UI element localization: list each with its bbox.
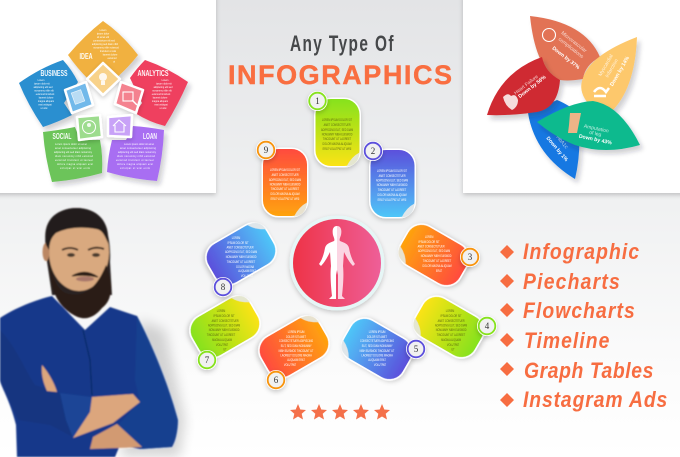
card 5: NIBH EUISMOD TINCIDUNT UT — [360, 348, 394, 353]
card 8: ADIPISCING ELIT, SED DIAM — [225, 249, 257, 254]
segment: loan: Lorem ipsum dolor sit amet — [124, 143, 154, 146]
hair sides — [45, 208, 112, 295]
card 6 — [252, 309, 336, 385]
segment: business: erat volutpat — [38, 104, 52, 106]
card 7: MAGNA ALIQUAM — [212, 337, 232, 342]
card 3: TINCIDUNT UT LAOREET — [423, 258, 451, 263]
card 6: LOREM IPSUM — [288, 329, 305, 334]
icon: kidney — [542, 28, 556, 42]
center circle with human body — [290, 216, 384, 310]
card 9: AMET CONSECTETUER — [272, 172, 299, 177]
card 9: NONUMMY NIBH EUISMOD — [270, 182, 301, 187]
feature list: Instagram Ads — [523, 388, 667, 412]
card 5: LAOREET DOLORE MAGNA — [362, 353, 393, 358]
petal: amputation — [537, 101, 640, 150]
card 7: UT — [223, 347, 227, 352]
card 4: AMET CONSECTETUER — [438, 318, 465, 323]
card 4: MAGNA ALIQUAM — [441, 337, 461, 342]
segment: social: Lorem ipsum dolor sit amet — [55, 143, 87, 146]
card 5 — [335, 311, 419, 387]
segment: business: euismod tincidunt — [36, 93, 55, 96]
shirt placket — [83, 330, 92, 395]
icon: foot — [568, 113, 581, 133]
shirt — [0, 296, 177, 457]
segment: business: ipsum dolor sit — [34, 82, 50, 86]
card 2 — [369, 148, 416, 218]
rating stars — [290, 404, 390, 420]
hair — [45, 208, 108, 250]
card 4: ADIPISCING ELIT, SED DIAM — [435, 323, 467, 328]
heading: any type of: Any Type Of — [290, 32, 395, 57]
badges: numbered circles: 6 — [274, 375, 279, 385]
segment: idea: tincidunt ut wisi — [100, 50, 117, 53]
icon tile: idea bulb — [87, 63, 120, 95]
panel: pentagon infographic — [0, 0, 216, 193]
segment: business: nonummy nibh elit — [34, 90, 54, 92]
card 1: DOLOR MAGNA ALIQUAM — [323, 141, 352, 146]
card 5: ELIT, SED DIAM NONUMMY — [362, 343, 393, 348]
segment: social: SOCIAL — [52, 132, 72, 141]
card 1: AMET CONSECTETUER — [324, 122, 351, 127]
card 4: VOLUTPAT — [447, 342, 459, 347]
segment: loan: adipiscing elit sed diam nonummy — [118, 151, 157, 154]
card 1: TINCIDUNT UT LAOREET — [323, 136, 351, 141]
card 1: ERAT VOLUTPAT UT WISI — [323, 146, 351, 151]
card 1: ADIPISCING ELIT, SED DIAM — [321, 127, 353, 132]
segment: business: laoreet dolore — [39, 96, 54, 100]
card 2: TINCIDUNT UT LAOREET — [378, 187, 406, 192]
card 7: AMET CONSECTETUER — [212, 318, 239, 323]
segment: loan: euismod tincidunt ut laoreet — [116, 159, 154, 162]
card 5: VOLUTPAT — [374, 362, 386, 367]
beard — [50, 262, 111, 318]
segment: analytics: ipsum dolor sit — [156, 82, 172, 86]
petal: myocardial: Down by 14% — [609, 55, 631, 87]
card 9 — [262, 148, 308, 218]
right sleeve — [118, 316, 178, 449]
segment: idea: ipsum dolor — [97, 32, 109, 36]
card 6: ALIQUAM ERAT — [287, 357, 305, 362]
segment: analytics: adipiscing elit sed — [154, 86, 173, 89]
segment: business: Lorem — [38, 79, 44, 82]
card 5: ALIQUAM ERAT — [368, 357, 386, 362]
petal: HbA1c: HbA1c — [555, 135, 569, 150]
segment: idea: Lorem — [100, 29, 106, 32]
card 8: NONUMMY NIBH EUISMOD — [226, 254, 257, 259]
card 1: LOREM IPSUM DOLOR SIT — [322, 117, 352, 122]
petal: amputation: Amputation — [583, 123, 609, 135]
card 3: DOLOR MAGNA ALIQUAM — [423, 263, 452, 268]
card 8: IPSUM DOLOR SIT — [227, 240, 249, 245]
card 8: DOLOR MAGNA — [236, 264, 255, 269]
card 2: ERAT VOLUTPAT UT WISI — [378, 197, 406, 202]
segment: idea — [68, 21, 138, 80]
skin: hand and forearms — [42, 365, 57, 392]
segment: business: magna aliquam — [38, 100, 54, 103]
segment: analytics: euismod tincidunt — [152, 93, 171, 96]
feature list: Flowcharts — [523, 299, 635, 323]
card 7: LOREM — [217, 308, 226, 313]
card 5: LOREM IPSUM — [369, 329, 386, 334]
segment: idea: laoreet dolore — [103, 54, 118, 56]
segment: social: diam nonummy nibh euismod — [55, 155, 94, 158]
card 7 — [183, 289, 267, 365]
segment: analytics: magna aliquam — [152, 100, 168, 103]
segment: loan: volutpat ut wisi enim — [120, 167, 150, 170]
segment: idea: adipiscing sed diam nibh — [92, 43, 119, 46]
card 6: DOLOR SIT AMET — [286, 334, 306, 339]
card 8: ALIQUAM ERAT — [238, 268, 256, 273]
feature list — [500, 240, 667, 412]
shirt cuff — [60, 393, 92, 438]
panel: petal infographic — [463, 0, 680, 193]
card 3: AMET CONSECTETUER — [418, 244, 445, 249]
feature list: Graph Tables — [524, 359, 653, 383]
card 8 — [199, 216, 283, 292]
segment: analytics: erat volutpat — [154, 104, 168, 106]
feature list: Timeline — [524, 329, 609, 353]
segment: loan: amet consectetuer adipiscing — [120, 147, 157, 150]
card 1 — [314, 98, 361, 168]
eyes and brows — [62, 248, 104, 250]
icon: human figure left half — [319, 226, 337, 299]
card 4: UT — [451, 347, 455, 352]
feature list: Piecharts — [523, 270, 620, 294]
petal: HbA1c: Down by 1% — [545, 136, 569, 163]
icon: human figure right half — [337, 226, 355, 299]
segment: idea: consectetuer elit sed — [93, 40, 116, 42]
segment: social: dolore magna aliquam erat — [57, 163, 93, 166]
segment: idea: euismod — [107, 57, 117, 60]
segment: social: euismod tincidunt ut laoreet — [55, 159, 93, 162]
badges: numbered circles: 2 — [371, 146, 375, 156]
card 8: TINCIDUNT UT LAOREET — [227, 259, 255, 264]
petal: heart failure — [487, 57, 560, 115]
card 7: ADIPISCING ELIT, SED DIAM — [208, 323, 240, 328]
petal: microvascular: Down by 37% — [551, 46, 581, 71]
card 7: VOLUTPAT — [216, 342, 228, 347]
moustache and mouth — [72, 272, 98, 277]
card 4: NONUMMY NIBH EUISMOD — [436, 327, 467, 332]
segment: loan: dolore magna aliquam erat — [117, 163, 153, 166]
card 7: IPSUM DOLOR SIT — [213, 313, 235, 318]
card 3 — [392, 217, 476, 293]
card 2: DOLOR MAGNA ALIQUAM — [378, 192, 407, 197]
badges: numbered circles: 1 — [315, 96, 320, 106]
segment: analytics: nonummy nibh elit — [152, 90, 172, 92]
petal: amputation: of leg — [589, 130, 602, 138]
card 4: TINCIDUNT UT LAOREET — [437, 332, 465, 337]
card 9: TINCIDUNT UT LAOREET — [271, 186, 299, 191]
heading: infographics: INFOGRAPHICS — [228, 60, 452, 90]
card 2: LOREM IPSUM DOLOR SIT — [377, 168, 407, 173]
card 8: VOLUTPAT — [241, 273, 253, 278]
card 9: ERAT VOLUTPAT UT WISI — [271, 196, 299, 201]
segment: idea: sit amet elit — [97, 36, 109, 39]
card 3: ADIPISCING ELIT, SED DIAM — [418, 248, 450, 253]
petal: HbA1c — [528, 100, 579, 179]
badges: numbered circles: 3 — [468, 252, 473, 262]
card 3: NONUMMY NIBH EUISMOD — [421, 253, 452, 258]
badges: numbered circles: 4 — [485, 321, 490, 331]
card 1: NONUMMY NIBH EUISMOD — [322, 132, 353, 137]
segment: idea: ut — [113, 60, 115, 64]
badges: numbered circles: 5 — [414, 344, 419, 354]
segment: analytics — [130, 60, 188, 126]
card 2: AMET CONSECTETUER — [379, 173, 406, 178]
segment: analytics: laoreet dolore — [153, 96, 168, 100]
card 8: LOREM — [232, 235, 241, 240]
segment: analytics: ut wisi — [160, 107, 167, 110]
card 9: DOLOR MAGNA ALIQUAM — [271, 191, 300, 196]
card 9: ADIPISCING ELIT, SED DIAM — [269, 177, 301, 182]
segment: business: adipiscing elit sed — [34, 86, 53, 89]
icon tile: loan house — [108, 115, 132, 137]
petal: myocardial: Myocardial — [597, 54, 615, 77]
petal: myocardial: Infarction — [604, 58, 620, 79]
card 5: DOLOR SIT AMET — [367, 334, 387, 339]
card 8: AMET CONSECTETUER — [227, 245, 254, 250]
petal: microvascular: complications — [557, 37, 585, 60]
card 6: NIBH EUISMOD TINCIDUNT UT — [279, 348, 313, 353]
segment: loan: LOAN — [143, 132, 157, 141]
segment: idea: IDEA — [80, 52, 93, 61]
petal: heart failure: Down by 56% — [517, 74, 548, 100]
card 5: CONSECTETUER ADIPISCING — [360, 338, 394, 343]
badges: numbered circles: 8 — [221, 282, 226, 292]
card 4 — [407, 289, 491, 365]
face — [49, 213, 109, 291]
card 9: LOREM IPSUM DOLOR SIT — [270, 167, 300, 172]
segment: social: adipiscing elit sed diam nonummy — [54, 151, 93, 154]
petal: amputation: Down by 43% — [578, 134, 613, 147]
badges: numbered circles: 7 — [205, 355, 210, 365]
segment: business: ut wisi — [41, 107, 48, 110]
card 7: NONUMMY NIBH EUISMOD — [209, 327, 240, 332]
petal: microvascular — [530, 16, 600, 80]
segment: analytics: ANALYTICS — [138, 69, 169, 78]
card 6: LAOREET DOLORE MAGNA — [281, 353, 312, 358]
card 7: TINCIDUNT UT LAOREET — [207, 332, 235, 337]
petal: myocardial — [581, 37, 637, 113]
card 3: ERAT — [436, 268, 442, 273]
badges: numbered circles — [197, 91, 497, 390]
badges: numbered circles: 9 — [264, 145, 269, 155]
petal: heart failure: Heart Failure — [513, 74, 540, 96]
segment: analytics: Lorem — [162, 79, 168, 82]
feature list: Infographic — [523, 240, 640, 264]
icon: hand and heart — [594, 88, 609, 96]
card 3: LOREM — [425, 234, 434, 239]
segment: social — [43, 127, 102, 182]
portrait: man in blue shirt with crossed arms — [0, 208, 185, 457]
segment: business: BUSINESS — [40, 69, 68, 78]
icon tile: analytics magnifier — [115, 82, 143, 113]
left sleeve — [0, 330, 92, 437]
petal: microvascular: Microvascular — [560, 30, 588, 54]
card 2: NONUMMY NIBH EUISMOD — [377, 182, 408, 187]
card 4: LOREM — [446, 308, 455, 313]
icon tile: social people — [77, 115, 102, 140]
card 3: IPSUM DOLOR SIT — [418, 239, 440, 244]
segment: loan: diam nonummy nibh euismod — [117, 155, 156, 158]
card 2: ADIPISCING ELIT, SED DIAM — [376, 178, 408, 183]
card 4: IPSUM DOLOR SIT — [440, 313, 462, 318]
card 6: CONSECTETUER ADIPISCING — [279, 338, 313, 343]
segment: business — [19, 60, 78, 127]
icon: heart — [503, 94, 518, 110]
segment: loan — [107, 126, 164, 181]
card 6: VOLUTPAT — [284, 362, 296, 367]
segment: idea: nonummy nibh euismod — [93, 46, 119, 50]
icon tile: business report — [65, 82, 93, 113]
card 6: ELIT, SED DIAM NONUMMY — [281, 343, 312, 348]
segment: social: volutpat ut wisi enim — [60, 167, 90, 170]
segment: social: amet consectetuer adipiscing — [55, 147, 92, 150]
